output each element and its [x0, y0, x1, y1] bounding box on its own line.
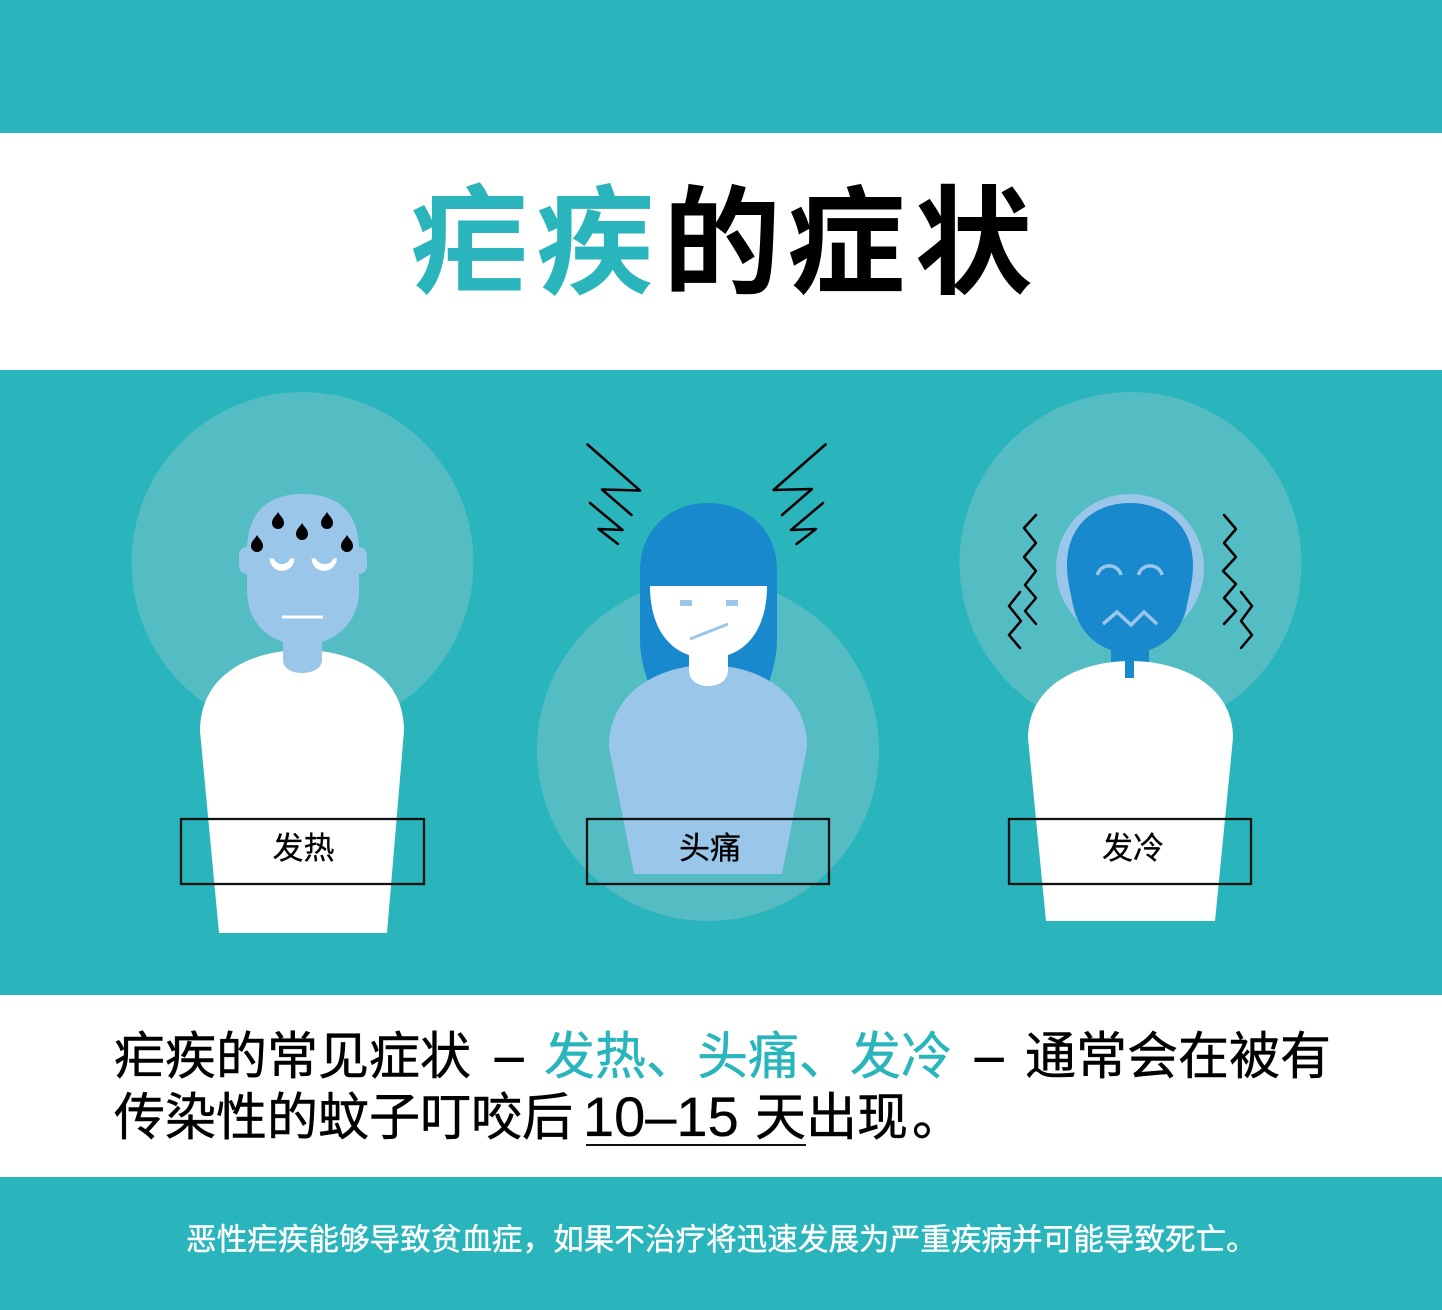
head with ears and neck	[239, 494, 367, 673]
title: 症	[787, 178, 905, 310]
icon: pain lightning right	[774, 444, 826, 544]
face: eyes and wavy mouth	[1098, 566, 1162, 625]
text block: common symptoms: 10–15	[583, 1085, 739, 1148]
icon: pain lightning left	[588, 444, 640, 544]
head and neck	[1067, 503, 1193, 665]
label: chills: 发冷	[1102, 831, 1164, 866]
text block: common symptoms	[114, 1027, 1331, 1148]
body: white shirt	[200, 650, 404, 933]
label: fever: 发热	[272, 831, 334, 866]
body: white shirt	[1028, 661, 1233, 921]
label: headache: 头痛	[679, 831, 741, 866]
figure: headache	[537, 444, 879, 921]
title	[410, 178, 1033, 310]
label: headache	[587, 819, 829, 884]
title: 疟	[410, 178, 529, 310]
hair	[640, 503, 777, 682]
text block: common symptoms: 发热、头痛、发冷	[544, 1028, 952, 1085]
underline	[586, 1144, 806, 1146]
title: 的	[663, 178, 781, 310]
icon: shiver lines right	[1223, 515, 1252, 648]
text block: common symptoms: –	[975, 1027, 1004, 1084]
title: 疾	[536, 178, 654, 310]
icon: sweat drops	[251, 512, 353, 552]
panel: symptoms	[0, 370, 1442, 995]
icon: shiver lines left	[1009, 515, 1036, 648]
face: closed eyes and mouth	[270, 558, 337, 618]
text block: common symptoms: 。	[912, 1089, 963, 1146]
footnote text: 恶性疟疾能够导致贫血症，如果不治疗将迅速发展为严重疾病并可能导致死亡。	[186, 1223, 1257, 1257]
facial features	[680, 600, 738, 639]
body: blue shirt	[609, 665, 807, 874]
bottom teal band	[0, 1177, 1442, 1310]
figure: fever	[132, 392, 474, 933]
face and neck	[650, 586, 767, 686]
shirt collar	[1125, 660, 1134, 678]
label: chills	[1009, 819, 1251, 884]
label: fever	[181, 819, 424, 884]
figure: chills	[960, 392, 1302, 921]
text block: common symptoms: 天出现	[755, 1089, 908, 1146]
text block: common symptoms: 疟疾的常见症状	[114, 1028, 471, 1085]
text block: common symptoms: 通常会在被有	[1025, 1028, 1331, 1085]
text block: common symptoms: –	[495, 1027, 524, 1084]
title: 状	[914, 178, 1033, 310]
text block: common symptoms: 传染性的蚊子叮咬后	[114, 1089, 573, 1146]
top teal band	[0, 0, 1442, 133]
hair ring	[1056, 494, 1204, 642]
